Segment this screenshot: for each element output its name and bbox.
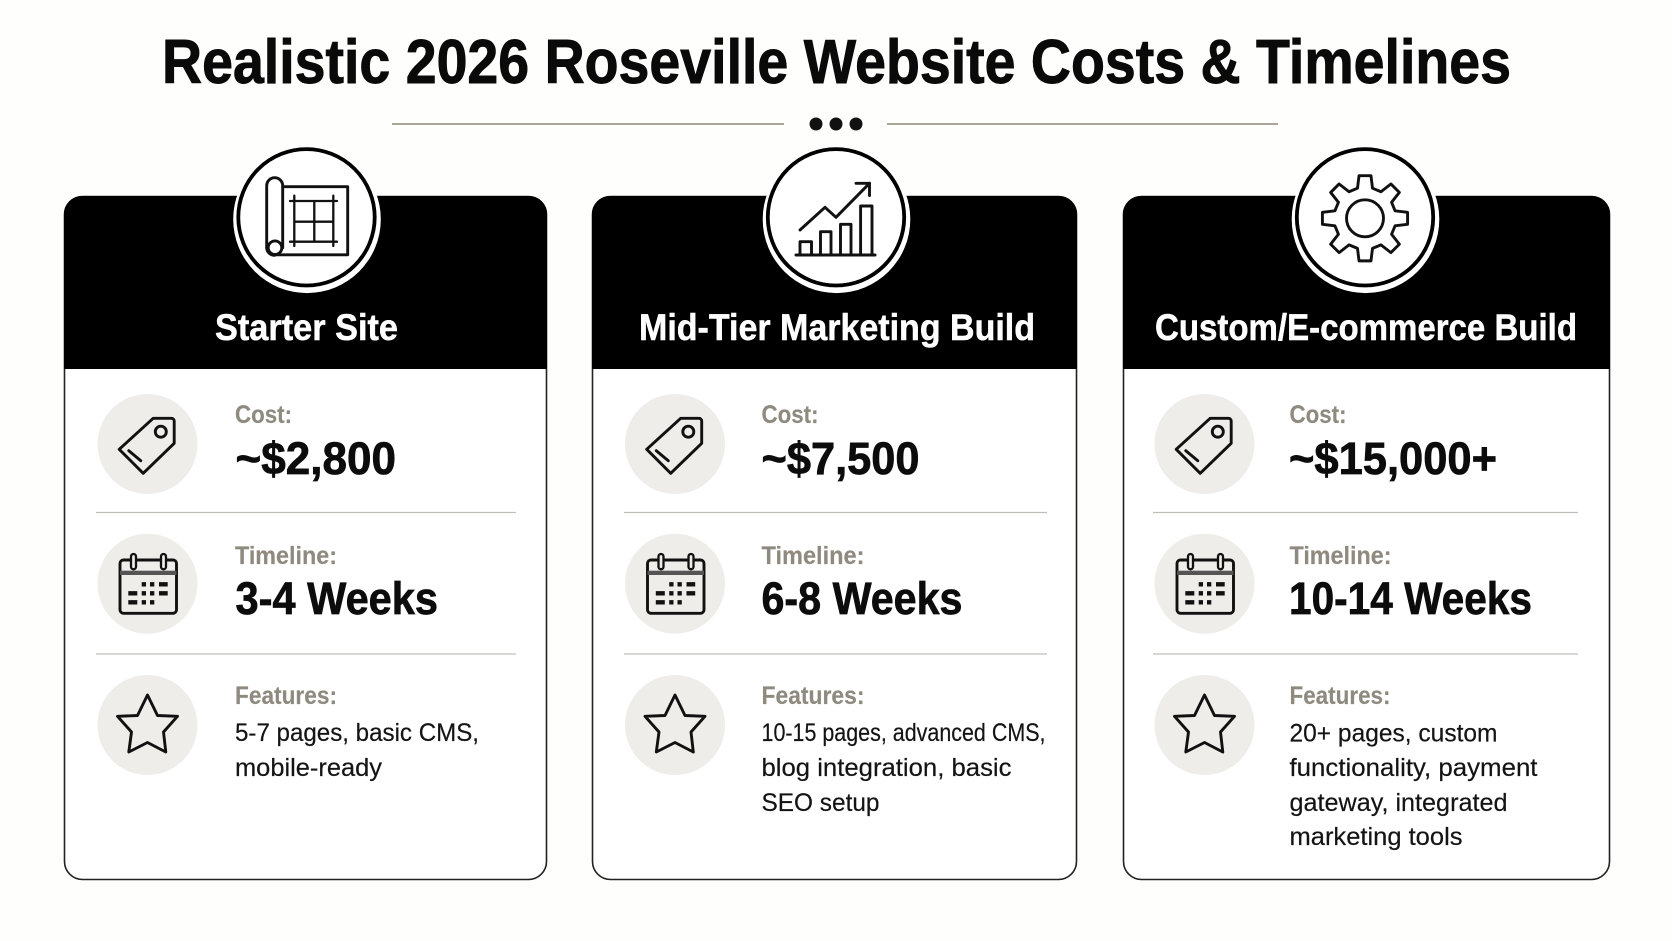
row: cost: ~$7,500 — [762, 433, 920, 484]
row: cost — [625, 394, 920, 494]
row: timeline: Timeline: — [762, 542, 864, 570]
icon: price tag — [119, 418, 174, 473]
row: features: mobile-ready — [235, 754, 382, 782]
icon badge: blueprint — [233, 146, 381, 293]
card heading: Starter Site — [215, 307, 398, 348]
icon: calendar — [120, 554, 176, 613]
panel: Mid-Tier Marketing Build — [592, 146, 1077, 880]
card outline — [1124, 196, 1610, 880]
row: features: functionality, payment — [1290, 754, 1538, 782]
row: features: Features: — [1290, 682, 1390, 710]
row: features: Features: — [235, 682, 337, 710]
row: features: Features: — [762, 682, 864, 710]
row: timeline: Timeline: — [235, 542, 337, 570]
card outline — [64, 196, 546, 880]
row: features: 10-15 pages, advanced CMS, — [762, 719, 1046, 747]
row: cost — [98, 394, 396, 494]
row: cost — [1154, 394, 1497, 494]
row: cost: Cost: — [762, 401, 818, 429]
row: features — [1154, 675, 1538, 851]
panel: Starter Site — [64, 146, 547, 880]
card heading: Custom/E-commerce Build — [1155, 307, 1577, 348]
row: features: SEO setup — [762, 789, 880, 817]
row: timeline — [98, 534, 438, 634]
card outline — [592, 196, 1076, 880]
row: features — [625, 675, 1046, 817]
icon: price tag — [1176, 418, 1231, 473]
card heading: Mid-Tier Marketing Build — [639, 307, 1035, 348]
row: features: blog integration, basic — [762, 754, 1012, 782]
row: features: 20+ pages, custom — [1290, 720, 1498, 748]
card header band — [1123, 196, 1610, 369]
row: features — [98, 675, 479, 782]
icon badge: growth chart — [763, 146, 910, 293]
icon: star — [1174, 695, 1234, 752]
row: timeline: 3-4 Weeks — [236, 573, 438, 624]
icon: price tag — [647, 418, 702, 473]
row: cost: ~$2,800 — [236, 433, 396, 484]
icon badge: gear — [1292, 146, 1439, 293]
icon: star — [118, 695, 178, 752]
row: cost: ~$15,000+ — [1289, 433, 1497, 484]
icon: calendar — [1177, 554, 1234, 613]
panel: Custom/E-commerce Build — [1123, 146, 1610, 880]
row: cost: Cost: — [235, 401, 292, 429]
row: timeline — [625, 534, 962, 634]
row: cost: Cost: — [1290, 401, 1346, 429]
card header band — [592, 196, 1077, 369]
row: features: marketing tools — [1290, 823, 1462, 851]
title: Realistic 2026 Roseville Website Costs & Timelines — [162, 28, 1511, 97]
title divider with dots — [392, 118, 1278, 130]
icon: star — [645, 695, 705, 752]
row: features: 5-7 pages, basic CMS, — [235, 719, 479, 747]
card header band — [64, 196, 547, 369]
row: timeline: 6-8 Weeks — [762, 573, 962, 624]
row: timeline: Timeline: — [1290, 542, 1392, 570]
row: timeline — [1154, 534, 1532, 634]
row: features: gateway, integrated — [1290, 789, 1508, 817]
row: timeline: 10-14 Weeks — [1289, 573, 1532, 624]
icon: calendar — [648, 554, 704, 613]
